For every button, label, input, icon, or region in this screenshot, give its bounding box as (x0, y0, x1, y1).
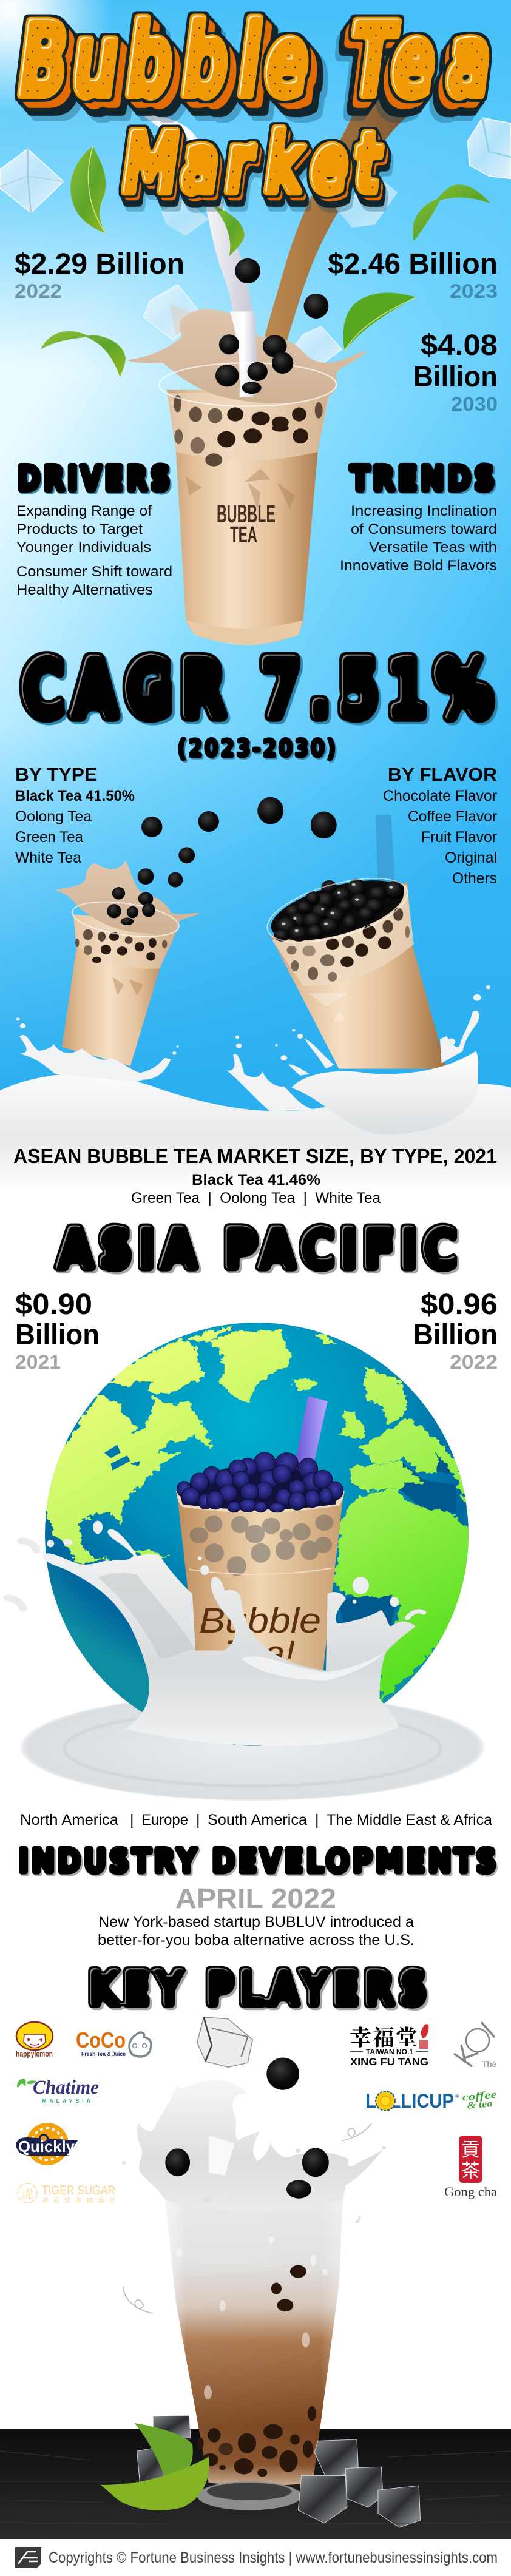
heading: drivers: DRIVERS (18, 459, 173, 499)
logo: Lollicup: coffee (462, 2088, 498, 2103)
segment: by flavor: BY FLAVOR (388, 764, 497, 785)
title word: Bubble: Bubble (18, 1, 308, 120)
stat: 2022 (15, 248, 184, 302)
stat: Asia Pacific 2021 (15, 1289, 100, 1373)
milk splash: right arms (288, 1011, 479, 1076)
other regions: | (196, 1812, 200, 1829)
falling ice cube (197, 2017, 252, 2067)
cup text (199, 1601, 321, 1673)
ASEAN other types: Green Tea | Oolong Tea | White Tea (131, 1190, 381, 1207)
milk bowl in front of right cup (292, 1051, 478, 1135)
heading: key players: KEY PLAYERS (87, 1961, 431, 2016)
cup rim (159, 363, 336, 406)
logo: Xing Fu Tang: XING FU TANG (350, 2056, 428, 2068)
other regions: | (130, 1812, 134, 1829)
logo: Chatime: MALAYSIA (42, 2098, 91, 2104)
tea leaf: upper left (70, 146, 106, 234)
tea stream (254, 46, 419, 396)
stat: 2023: 2023 (450, 280, 498, 302)
logo: Xing Fu Tang (350, 2024, 428, 2068)
falling boba pearls (138, 797, 337, 887)
globe (33, 1323, 476, 1746)
logo: KOI The (454, 2022, 496, 2069)
tea leaf: lower left (41, 331, 126, 377)
logo: Lollicup: ® (455, 2094, 459, 2099)
dark seas (336, 1455, 456, 1626)
cup body (178, 1499, 343, 1675)
logo: Gong cha: 茶 (461, 2160, 480, 2182)
logo: Lollicup: LOLLICUP (365, 2090, 454, 2112)
left cup splash (55, 860, 200, 935)
logo: Chatime: Chatime (33, 2077, 99, 2099)
logo: Lollicup (365, 2088, 498, 2112)
logo: Lollicup: & tea (467, 2099, 493, 2111)
water drops (176, 2237, 328, 2399)
left cup (62, 914, 179, 1066)
middle cups illustration (0, 797, 511, 1190)
development date: APRIL 2022 (175, 1883, 336, 1914)
ice cube: center left (143, 285, 204, 340)
development description: New York-based startup BUBLUV introduced a (98, 1913, 414, 1930)
other regions (20, 1812, 492, 1829)
stat: 2030 (413, 329, 498, 415)
purple straw (292, 1396, 328, 1483)
logo: Tiger Sugar: 虎 (22, 2188, 33, 2201)
stat: 2030: $4.08 (421, 329, 498, 362)
milk crown (137, 2080, 383, 2213)
hero cup (167, 390, 330, 645)
segment: by type: BY TYPE (15, 764, 97, 785)
logo: Tiger Sugar (18, 2183, 115, 2205)
cup text: Bubble (199, 1601, 321, 1640)
drivers list: Healthy Alternatives (16, 582, 153, 598)
pearls in glass (197, 2265, 316, 2477)
drivers list: Expanding Range of (16, 503, 152, 519)
translucent pearls (190, 1514, 333, 1576)
boba cup on globe (176, 1396, 345, 1675)
milk stream (137, 111, 256, 397)
logo: CoCo: CoCo (76, 2028, 126, 2052)
table wood grain (0, 2451, 511, 2524)
other regions: South America (208, 1812, 307, 1829)
development description (98, 1913, 415, 1949)
footer (15, 2547, 498, 2568)
logo: Gong cha: 貢 (461, 2139, 480, 2160)
ice cube: far left (0, 149, 64, 212)
stat: Asia Pacific 2021: 2021 (15, 1351, 61, 1373)
cup label (217, 499, 276, 548)
milk splash: left (19, 1035, 171, 1082)
stat: 2030: 2030 (451, 393, 498, 415)
stat: 2022: $2.29 Billion (15, 248, 184, 280)
right cup boba mass (257, 865, 417, 956)
left splash pearls (107, 887, 155, 925)
falling boba (266, 2058, 299, 2090)
logo: Gong cha: Gong cha (444, 2184, 497, 2199)
logo: Gong cha (444, 2136, 497, 2199)
ASEAN market size heading: ASEAN BUBBLE TEA MARKET SIZE, BY TYPE, 2021 (13, 1145, 497, 1167)
stat: 2022: 2022 (15, 280, 62, 302)
logo: Xing Fu Tang: 幸福堂 (350, 2026, 418, 2050)
milk wave (0, 1074, 511, 1190)
illustration: pouring streams, hero cup, ice and leaves (0, 46, 511, 645)
stat: 2023: $2.46 Billion (328, 248, 498, 280)
segment: by flavor: Others (452, 870, 497, 887)
cup lip (176, 1491, 345, 1512)
CAGR period: (2023-2030) (177, 735, 337, 763)
stat: Asia Pacific 2022 (413, 1289, 498, 1373)
stat: Asia Pacific 2021: Billion (15, 1319, 100, 1351)
glass table (0, 2429, 511, 2539)
logo: Xing Fu Tang: TAIWAN NO.1 (366, 2048, 413, 2056)
cup label: BUBBLE (217, 499, 276, 528)
milk stream lower overlay (230, 311, 257, 397)
tea splash (127, 309, 366, 403)
continents (33, 1326, 476, 1702)
right cup (271, 882, 447, 1069)
other regions: | (315, 1812, 319, 1829)
title word: Market: Market (122, 113, 383, 212)
stat: Asia Pacific 2022: $0.96 (421, 1289, 498, 1321)
title word: Tea: Tea (350, 1, 491, 120)
left cup rim (69, 896, 182, 943)
glass base (197, 2481, 302, 2510)
stat: Asia Pacific 2022: 2022 (450, 1351, 498, 1373)
tea leaf: upper right (413, 184, 490, 241)
milk splash: center (226, 1054, 313, 1111)
trends list: Innovative Bold Flavors (340, 558, 497, 574)
blue straw (376, 815, 395, 886)
ice cube: under title left (161, 198, 209, 235)
milk splash around globe cup (7, 1521, 424, 1746)
other regions: Europe (141, 1812, 188, 1829)
segment: by flavor: Chocolate Flavor (383, 787, 497, 804)
segment: by type: Black Tea 41.50% (15, 787, 135, 804)
tea leaf: center (212, 204, 245, 257)
logo: Happy Lemon (16, 2022, 53, 2058)
milk drops and curls (122, 2146, 386, 2223)
segment: by flavor: Original (445, 849, 497, 866)
logo: Quickly (16, 2123, 78, 2165)
milk droplets (16, 985, 490, 1060)
segment: by flavor: Fruit Flavor (421, 829, 497, 846)
trends list: Versatile Teas with (369, 539, 497, 556)
segment: by type (15, 764, 135, 866)
ASEAN share: Black Tea 41.46% (192, 1172, 320, 1189)
ice cube: center right (293, 326, 342, 368)
sky background (0, 0, 511, 1128)
segment: by type: Green Tea (15, 829, 83, 846)
logo: CoCo: Fresh Tea & Juice (81, 2051, 126, 2058)
glass body (165, 2200, 343, 2486)
drivers list: Consumer Shift toward (16, 564, 172, 580)
logo: CoCo (76, 2028, 151, 2058)
blueberry pearls (177, 1452, 343, 1512)
logo: KOI The: Thé (482, 2059, 496, 2069)
trends list: of Consumers toward (351, 521, 497, 538)
other regions: The Middle East & Africa (327, 1812, 492, 1829)
logo: Happy Lemon: happylemon (16, 2049, 53, 2058)
drivers list: Younger Individuals (16, 539, 151, 556)
milk droplets (7, 1541, 424, 1618)
milk plate under globe (21, 1694, 484, 1801)
footer logo mark (18, 2552, 38, 2564)
ice cube: far right (468, 118, 511, 179)
trends list: Increasing Inclination (351, 503, 497, 519)
tea leaf: right of cup (343, 293, 416, 351)
bottom glass illustration (100, 2017, 421, 2527)
logo: Tiger Sugar: TIGER SUGAR (42, 2183, 115, 2197)
falling boba pearls (215, 258, 328, 394)
stat: 2023 (328, 248, 498, 302)
tea leaves on table (100, 2423, 209, 2510)
trends list (340, 503, 497, 574)
title: Bubble Tea Market (18, 1, 491, 212)
logo: Tiger Sugar: 老虎堂黑糖專売 (42, 2196, 115, 2205)
ice cubes on table (137, 2416, 421, 2527)
logo: Chatime (17, 2077, 99, 2104)
cup text: Tea! (225, 1634, 295, 1673)
segment: by type: Oolong Tea (15, 808, 92, 825)
stat: 2030: Billion (413, 361, 498, 393)
stat: Asia Pacific 2022: Billion (413, 1319, 498, 1351)
other regions: North America (20, 1812, 118, 1829)
footer logo (15, 2547, 41, 2568)
drivers list (16, 503, 172, 598)
segment: by flavor (383, 764, 497, 887)
logo: Quickly: Quickly (18, 2137, 75, 2156)
segment: by type: White Tea (15, 849, 81, 866)
stat: Asia Pacific 2021: $0.90 (15, 1289, 92, 1321)
development description: better-for-you boba alternative across the U.S. (98, 1932, 415, 1949)
cup label: TEA (230, 522, 257, 548)
ice cube: under title right (336, 176, 398, 228)
great lakes (104, 1445, 140, 1471)
drivers list: Products to Target (16, 521, 143, 538)
crown pearls (165, 2148, 329, 2199)
segment: by flavor: Coffee Flavor (408, 808, 497, 825)
